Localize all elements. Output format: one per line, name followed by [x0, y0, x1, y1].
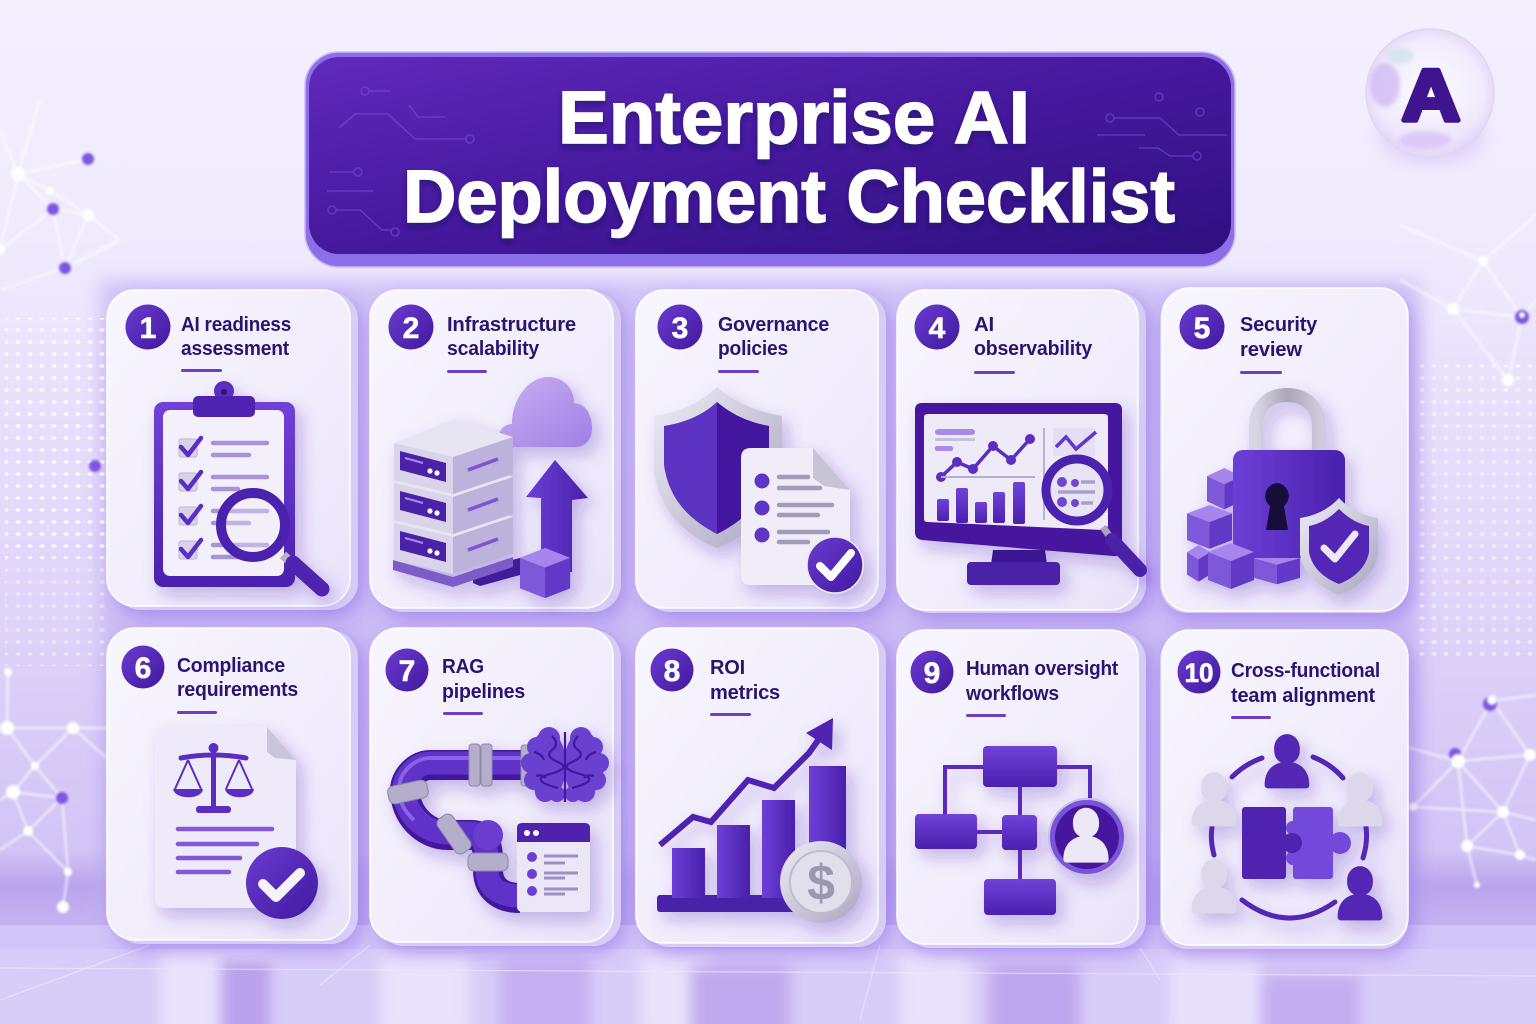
number badge [1178, 650, 1220, 694]
number badge: 3 [672, 312, 688, 345]
panel: 10 Cross-functional team alignment [1160, 630, 1408, 949]
heading: policies [718, 338, 788, 360]
heading: Compliance [177, 655, 285, 677]
number badge [122, 646, 164, 688]
heading: requirements [177, 679, 298, 701]
number badge [910, 650, 954, 694]
panel: 6 Compliance requirements [107, 628, 358, 944]
heading: assessment [181, 338, 290, 360]
heading [442, 656, 525, 703]
icon: growth chart with coin: $ [807, 855, 835, 911]
icon: workflow with person [915, 746, 1125, 915]
heading [974, 314, 1093, 360]
heading [181, 314, 291, 360]
number badge: 8 [664, 655, 680, 688]
number badge: 5 [1194, 312, 1210, 345]
panel: 5 Security review [1160, 288, 1408, 613]
number badge: 10 [1184, 658, 1214, 688]
heading: pipelines [442, 681, 525, 703]
panel: 4 AI observability [897, 290, 1146, 613]
title text: Enterprise AI [558, 76, 1030, 159]
heading: Cross-functional [1231, 660, 1380, 682]
heading: team alignment [1231, 685, 1376, 707]
logo bubble [1366, 29, 1494, 163]
icon: monitor dashboard with magnifier [915, 403, 1140, 585]
heading: workflows [965, 683, 1059, 705]
number badge [1180, 304, 1224, 350]
icon: growth chart with coin [657, 718, 862, 923]
icon: server stack, cloud, arrow [393, 377, 592, 598]
heading: Infrastructure [447, 314, 576, 336]
heading: AI readiness [181, 314, 291, 336]
number badge [650, 648, 694, 692]
number badge: 9 [924, 657, 940, 690]
heading [1231, 660, 1380, 707]
panel: 9 Human oversight workflows [897, 630, 1146, 948]
heading [177, 655, 298, 701]
heading: ROI [710, 657, 745, 679]
number badge: 7 [399, 655, 415, 688]
heading [1240, 314, 1318, 361]
heading [718, 314, 829, 360]
heading: scalability [447, 338, 540, 360]
heading [965, 658, 1118, 705]
title text: Deployment Checklist [403, 155, 1175, 238]
number badge: 4 [929, 312, 946, 345]
icon: shield and policy document [654, 387, 863, 593]
panel: 7 RAG pipelines [370, 628, 621, 946]
number badge [386, 648, 428, 692]
panel: 2 Infrastructure scalability [370, 290, 621, 612]
icon: legal document with scales and check [155, 727, 318, 919]
icon: team circle with puzzle [1192, 734, 1382, 920]
icon: clipboard checklist with magnifier [154, 381, 322, 589]
heading: observability [974, 338, 1093, 360]
title text [403, 76, 1175, 238]
number badge: 6 [135, 652, 151, 685]
number badge [658, 304, 702, 350]
heading: Human oversight [966, 658, 1118, 680]
icon: padlock, cubes and shield [1187, 395, 1378, 595]
number badge: 1 [140, 312, 156, 345]
icon: pipes, brain and document window [387, 727, 609, 912]
panel: 3 Governance policies [636, 290, 886, 612]
panel: 1 AI readiness assessment [107, 290, 358, 610]
heading: RAG [442, 656, 484, 678]
heading: Security [1240, 314, 1318, 336]
panel: 8 ROI metrics [636, 628, 886, 947]
number badge [126, 304, 170, 350]
heading [710, 657, 780, 704]
heading: review [1240, 339, 1303, 361]
heading [447, 314, 576, 360]
number badge [914, 304, 960, 350]
number badge [388, 304, 434, 350]
heading: AI [974, 314, 994, 336]
title banner [305, 52, 1235, 267]
heading: metrics [710, 682, 780, 704]
number badge: 2 [403, 312, 419, 345]
logo letter: A [1402, 56, 1460, 136]
heading: Governance [718, 314, 829, 336]
